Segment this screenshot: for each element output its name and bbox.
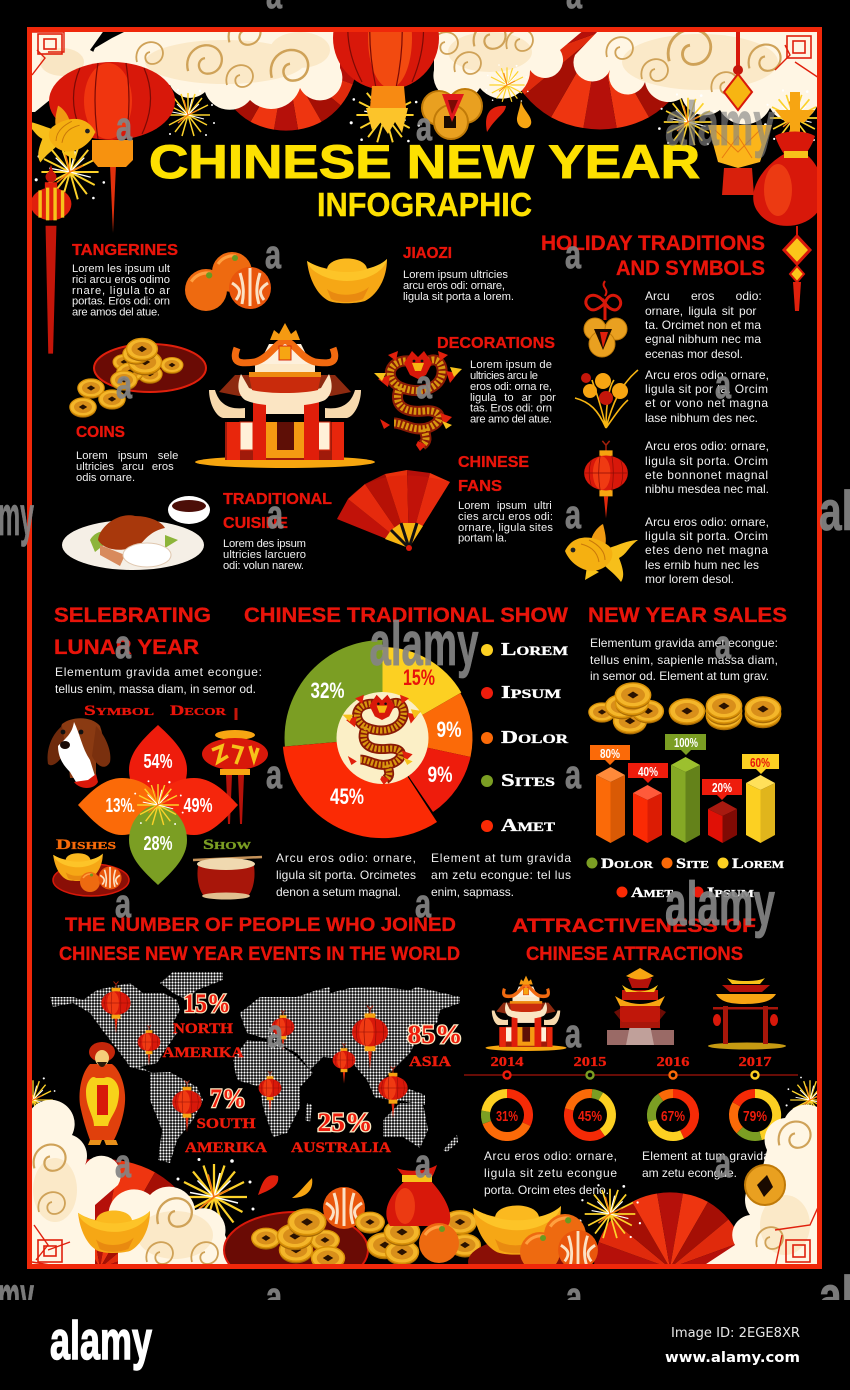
top border decoration (24, 0, 824, 354)
drop: bottom red (258, 1175, 278, 1195)
paragraph: element: Element at tum gravida (642, 1149, 770, 1163)
icon: roast duck plate (62, 496, 210, 570)
heading: LUNAR YEAR (54, 636, 199, 659)
firework: top left (168, 89, 215, 136)
heading (59, 915, 460, 965)
icon: holiday lantern (584, 441, 628, 518)
stock watermarks: a (115, 623, 132, 667)
icon: dragon decoration (374, 351, 462, 451)
value: 32%: 32% (310, 678, 344, 703)
block: holiday traditions heading (541, 232, 765, 280)
heading: THE NUMBER OF PEOPLE WHO JOINED (65, 915, 456, 936)
paragraph: holiday 4: mor lorem desol. (645, 572, 734, 586)
lantern: small left (31, 165, 71, 354)
value: 54%: 54% (144, 751, 173, 773)
node: 2014: 2014 (490, 1055, 524, 1070)
cloud: top centre left (93, 32, 342, 110)
paragraph: holiday 1: ornare, ligula sit por (645, 304, 756, 318)
icon: gold ingot (307, 258, 387, 303)
fan: bottom left (85, 1159, 176, 1264)
block: traditional cuisine (223, 491, 332, 572)
bottom border decoration (32, 1076, 817, 1264)
paragraph: holiday 1: Arcu eros odio: (645, 289, 762, 303)
firework: far right (764, 90, 817, 142)
paragraph: holiday 2: et or vono net magna (645, 396, 768, 410)
icon: main temple (195, 323, 375, 468)
petal: bottom 28% (129, 805, 187, 885)
footer: alamy logo: alamy (50, 1311, 152, 1371)
paragraph: tellus enim, sapienle massa diam, (590, 653, 778, 667)
paragraph: Elementum gravida amet econgue: (590, 636, 778, 650)
gold lantern top of bag (775, 92, 815, 132)
fan: top right (522, 32, 669, 130)
block: tangerines: are amos del atue. (72, 306, 160, 318)
heading: CHINESE TRADITIONAL SHOW (244, 604, 568, 627)
dotted world map (50, 972, 460, 1163)
cloud: bottom right (700, 1105, 819, 1268)
panel: people who joined (50, 915, 462, 1163)
stock watermarks: a (715, 1142, 732, 1186)
intro text: tellus enim, massa diam, in semor od. (55, 682, 256, 696)
donut: 2016 67%: 67% (661, 1108, 685, 1125)
lantern: top left (49, 62, 175, 233)
slice: 32% green (285, 640, 382, 746)
paragraph: arcu (484, 1149, 617, 1197)
node: 2016: 2016 (656, 1055, 690, 1070)
petal: left 13% (78, 778, 158, 835)
bar: 40% red (628, 763, 668, 843)
value: 45%: 45% (330, 784, 364, 809)
stock watermarks: a (715, 363, 732, 407)
block: coins: odis ornare. (76, 472, 135, 484)
stock watermarks: a (267, 493, 284, 537)
stock watermarks: a (266, 1275, 283, 1319)
block: jiaozi: arcu eros odi: ornare, (403, 280, 505, 292)
label: south america: AMERIKA (185, 1140, 267, 1156)
stock watermarks: a (416, 105, 433, 149)
node: 2017: 2017 (738, 1055, 772, 1070)
money bag top right (753, 132, 824, 226)
money bag bottom (386, 1165, 450, 1226)
paragraph: holiday 1: egnal nibhum nec ma (645, 332, 761, 346)
paragraph: holiday 4: Arcu eros odio: ornare, (645, 515, 769, 529)
paragraph: arcu (276, 851, 416, 899)
stock watermarks: a (115, 882, 132, 926)
firework: fish (34, 149, 106, 200)
panel: selebrating lunar year (48, 604, 268, 900)
value: 9% red: 9% (428, 762, 452, 787)
cloud: top centre (433, 32, 582, 99)
paragraph: holiday 2: Arcu eros odio: ornare, (645, 368, 769, 382)
slice: 15% yellow (382, 647, 461, 738)
lantern: top centre (333, 32, 439, 134)
stock watermarks: alamy (370, 610, 479, 679)
block: jiaozi: JIAOZI (403, 245, 452, 262)
legend: Ipsum (707, 885, 755, 901)
icon: red fan (337, 470, 450, 551)
paragraph: holiday 3: ete bonnonet magnal (645, 468, 768, 482)
firework: right (658, 93, 718, 145)
block: decorations: ultricies arcu le (470, 370, 538, 382)
block: chinese fans (458, 454, 553, 544)
bar: 80% orange: 80% (600, 746, 620, 761)
heading: ATTRACTIVENESS OF (512, 916, 756, 937)
paragraph: arcu: porta. Orcim etes deno. (484, 1183, 609, 1197)
coins with red knot (422, 89, 482, 139)
legend: Amet (631, 885, 674, 901)
value: 28%: 28% (144, 833, 173, 855)
label: decor: Decor (170, 703, 227, 719)
drop: bottom gold (292, 1178, 312, 1198)
bar: 60% yellow (742, 754, 779, 843)
gold lantern right (708, 125, 772, 195)
firework: bottom centre left (176, 1158, 254, 1224)
block: jiaozi: Lorem ipsum ultricies (403, 269, 508, 281)
slice: 9% orange (382, 693, 473, 757)
icon: firework bouquet (575, 370, 638, 428)
icon: temple small (486, 976, 566, 1051)
stock watermarks: a (267, 1012, 284, 1056)
label: north america: AMERIKA (162, 1045, 244, 1061)
icon: dog (48, 718, 110, 788)
plate with coins (223, 1208, 369, 1264)
subtitle: INFOGRAPHIC (317, 186, 532, 223)
heading: CHINESE NEW YEAR EVENTS IN THE WORLD (59, 944, 460, 965)
value: 15%: 15% (403, 665, 435, 690)
bar: 20% dark red: 20% (712, 780, 732, 795)
drop: red (486, 106, 506, 132)
firework centre (132, 780, 184, 825)
stock watermarks: a (115, 1142, 132, 1186)
label: south america: SOUTH (196, 1116, 256, 1132)
stock watermarks: a (266, 753, 283, 797)
paragraph: holiday 4 (645, 515, 769, 586)
stock watermarks: a (715, 623, 732, 667)
pendant right (784, 226, 810, 311)
icon: dishes plate (53, 853, 129, 896)
legend (586, 856, 785, 901)
paragraph: element: am zetu econgue: tel lus (431, 868, 571, 882)
block: traditional cuisine: ultricies larcuero (223, 549, 306, 561)
block: tangerines: TANGERINES (72, 242, 178, 259)
label: north america: NORTH (173, 1021, 233, 1037)
goldfish: top left (32, 106, 96, 162)
paragraph: arcu: Arcu eros odio: ornare, (276, 851, 416, 865)
label: show: Show (203, 837, 251, 853)
stock watermarks: a (565, 493, 582, 537)
hanging pendant (724, 29, 752, 110)
paragraph: holiday 1 (645, 289, 762, 361)
node: 2014 (490, 1055, 524, 1078)
paragraph: in semor od. Element at tum grav. (590, 669, 769, 683)
slice: 45% red (283, 738, 437, 838)
paragraph: element: am zetu econgue. (642, 1166, 737, 1180)
block: decorations (437, 335, 556, 426)
label: asia: 85% (408, 1020, 462, 1049)
icon: goldfish (565, 524, 638, 582)
value: 49%: 49% (184, 795, 213, 817)
paragraph: arcu: denon a setum magnal. (276, 885, 401, 899)
block: tangerines: rnare, ligula to ar (72, 285, 170, 297)
block: tangerines: Lorem les ipsum ult (72, 263, 171, 275)
block: decorations: Lorem ipsum de (470, 359, 552, 371)
block: traditional cuisine: CUISINE (223, 515, 288, 532)
stock watermarks: alamy (665, 870, 775, 939)
paragraph: holiday 3 (645, 439, 769, 496)
icon: tangerines (185, 252, 271, 311)
paragraph: holiday 3: ligula sit porta. Orcim (645, 454, 768, 468)
title (149, 135, 700, 223)
firework: lantern centre (350, 92, 420, 143)
donut: 2017 79%: 79% (743, 1108, 767, 1125)
legend: Sites (501, 770, 555, 790)
label: australia: AUSTRALIA (291, 1140, 391, 1156)
label: dishes: Dishes (56, 837, 116, 853)
icon: gate (708, 978, 786, 1050)
peeled tangerine (323, 1187, 365, 1229)
petal: top 54% (129, 725, 187, 805)
drop: gold (517, 100, 531, 128)
label: south america: 7% (210, 1084, 246, 1113)
cloud: top left corner (32, 32, 103, 112)
cloud: bottom mid left (108, 1186, 228, 1264)
block: coins (76, 424, 178, 484)
block: coins: Lorem ipsum sele (76, 450, 178, 462)
panel: chinese traditional show (244, 604, 571, 899)
stock watermarks: alamy (665, 90, 775, 159)
gold coin right (745, 1165, 785, 1205)
stock watermarks: a (416, 363, 433, 407)
panel: new year sales (586, 604, 787, 901)
block: traditional cuisine: Lorem des ipsum (223, 538, 306, 550)
donut: 2014 31% (485, 1094, 529, 1137)
icon: knot and coins (584, 281, 627, 357)
paragraph: arcu: ligula sit zetu econgue (484, 1166, 617, 1180)
paragraph: holiday 2: ligula sit por ta. Orcim (645, 382, 768, 396)
node: 2015 (574, 1055, 606, 1078)
paragraph: element (642, 1149, 770, 1180)
icon: coins on plate (70, 338, 206, 418)
plate bottom right (468, 1237, 592, 1287)
heading: NEW YEAR SALES (588, 604, 787, 627)
firework: left edge (32, 1077, 56, 1106)
bar: 80% orange (590, 745, 630, 843)
stock watermarks: a (116, 105, 133, 149)
node: 2017 (738, 1055, 772, 1078)
bar: 100% green: 100% (674, 735, 698, 750)
label: australia: 25% (318, 1108, 372, 1137)
donut: 2015 45% (568, 1094, 611, 1136)
value: 13%: 13% (106, 795, 133, 817)
legend: Dolor (601, 856, 654, 872)
paragraph: element: enim, sapmass. (431, 885, 514, 899)
paragraph: holiday 4: les ernib hum nec les (645, 558, 759, 572)
block: traditional cuisine: TRADITIONAL (223, 491, 332, 508)
bar chart (590, 734, 779, 843)
stock watermarks: my (0, 1264, 34, 1327)
stock watermarks: my (0, 484, 34, 547)
block: chinese fans: ornare, ligula sites (458, 522, 553, 534)
block: tangerines: portas. Eros odi: orn (72, 296, 170, 308)
title: CHINESE NEW YEAR (149, 135, 700, 188)
legend: Lorem (501, 639, 568, 659)
block: tangerines: rici arcu eros odimo (72, 274, 170, 286)
heading: CHINESE ATTRACTIONS (526, 944, 743, 965)
petal chart (78, 725, 238, 885)
label: south america (185, 1084, 267, 1156)
block: chinese fans: cies arcu eros odi: (458, 511, 553, 523)
block: traditional cuisine: odi: volun narew. (223, 560, 304, 572)
block: jiaozi: ligula sit porta a lorem. (403, 291, 514, 303)
icon: decor lantern (202, 708, 268, 824)
block: chinese fans: CHINESE (458, 454, 529, 471)
block: decorations: DECORATIONS (437, 335, 555, 352)
orange bottom centre (419, 1223, 459, 1263)
fan: top left (234, 64, 354, 131)
paragraph: holiday 1: ecenas mor desol. (645, 347, 743, 361)
block: coins: COINS (76, 424, 125, 441)
block: holiday traditions heading: AND SYMBOLS (616, 257, 765, 280)
stock watermarks: a (415, 882, 432, 926)
paragraph: arcu: Arcu eros odio: ornare, (484, 1149, 617, 1163)
icon: pagoda (607, 968, 674, 1045)
block: jiaozi (403, 245, 514, 303)
label: north america: 15% (184, 989, 230, 1018)
bar: 20% dark red (702, 779, 742, 843)
footer: website: www.alamy.com (665, 1350, 800, 1366)
heading (54, 604, 211, 659)
block: decorations: eros odi: orna re, (470, 381, 552, 393)
legend (481, 639, 569, 835)
coin pile bottom centre (356, 1211, 480, 1265)
label: asia: ASIA (409, 1054, 451, 1070)
ingot bottom right (473, 1205, 561, 1255)
icon: coin stack and coins (589, 683, 781, 734)
block: holiday traditions heading: HOLIDAY TRADITIONS (541, 232, 765, 255)
block: coins: ultricies arcu eros (76, 461, 174, 473)
ingot: bottom left (78, 1211, 150, 1253)
block: chinese fans: portam la. (458, 532, 507, 544)
paragraph: arcu: ligula sit porta. Orcimetes (276, 868, 416, 882)
fan: bottom right (594, 1192, 735, 1264)
pie chart (283, 640, 473, 838)
intro text: Elementum gravida amet econgue: (55, 665, 262, 679)
donut: 2015 45%: 45% (578, 1108, 602, 1125)
intro text (55, 665, 262, 696)
value: 9% orange: 9% (436, 717, 462, 742)
legend: Site (676, 856, 709, 872)
legend: Amet (501, 815, 555, 835)
figure: chinese god of wealth (79, 1042, 125, 1145)
cloud: top right (573, 29, 819, 124)
stock watermarks: a (566, 1275, 583, 1319)
block: decorations: tas. Eros odi: orn (470, 402, 552, 414)
node: 2016 (656, 1055, 690, 1078)
stock watermarks: a (565, 1012, 582, 1056)
paragraph: holiday 4: etes deno net magna (645, 543, 768, 557)
slice: 9% red (382, 738, 470, 812)
legend: Lorem (732, 856, 785, 872)
heading (512, 916, 756, 965)
stock watermarks: a (116, 363, 133, 407)
tangerines bottom right (520, 1214, 598, 1272)
node: 2015: 2015 (574, 1055, 606, 1070)
label: symbol: Symbol (84, 703, 154, 719)
block: chinese fans: FANS (458, 478, 502, 495)
block: decorations: ligula to ar por (470, 392, 556, 404)
panel: attractiveness (464, 916, 798, 1197)
legend: Ipsum (501, 682, 561, 702)
paragraph: holiday 4: ligula sit porta. Orcim (645, 529, 768, 543)
heading: SELEBRATING (54, 604, 211, 627)
label: australia (291, 1108, 391, 1156)
bar: 40% red: 40% (638, 764, 658, 779)
bar: 100% green (665, 734, 706, 843)
stock watermarks: a (415, 1142, 432, 1186)
stock watermarks: a (565, 753, 582, 797)
donut: 2016 67% (651, 1094, 695, 1137)
label: north america (162, 989, 244, 1061)
block: decorations: are amo del atue. (470, 414, 552, 426)
paragraph (590, 636, 778, 683)
paragraph: holiday 3: Arcu eros odio: ornare, (645, 439, 769, 453)
block: tangerines (72, 242, 178, 318)
block: chinese fans: Lorem ipsum ultri (458, 500, 552, 512)
timeline (464, 1055, 798, 1078)
donut: 2014 31%: 31% (496, 1108, 518, 1125)
firework: bottom centre right (579, 1184, 641, 1238)
cloud: bottom left (29, 1100, 121, 1268)
paragraph: holiday 2 (645, 368, 769, 425)
map lanterns (101, 981, 408, 1132)
stock watermarks: a (265, 233, 282, 277)
dragon centre (336, 692, 428, 785)
paragraph: element: Element at tum gravida (431, 851, 571, 865)
paragraph: element (431, 851, 571, 899)
petal: right 49% (158, 778, 238, 835)
donut: 2017 79% (733, 1093, 777, 1137)
bar: 60% yellow: 60% (750, 755, 770, 770)
paragraph: holiday 1: ta. Orcimet non et ma (645, 318, 761, 332)
paragraph: holiday 3: nibhu mesdea nec mal. (645, 482, 769, 496)
footer: image id: Image ID: 2EGE8XR (671, 1325, 800, 1341)
firework: right edge (786, 1076, 817, 1109)
icon: drum (193, 857, 262, 900)
stock watermarks: a (565, 233, 582, 277)
label: asia (408, 1020, 462, 1070)
paragraph: holiday 2: lase nibhum des nec. (645, 411, 758, 425)
legend: Dolor (501, 727, 569, 747)
firework: cloud bottom (485, 64, 529, 102)
